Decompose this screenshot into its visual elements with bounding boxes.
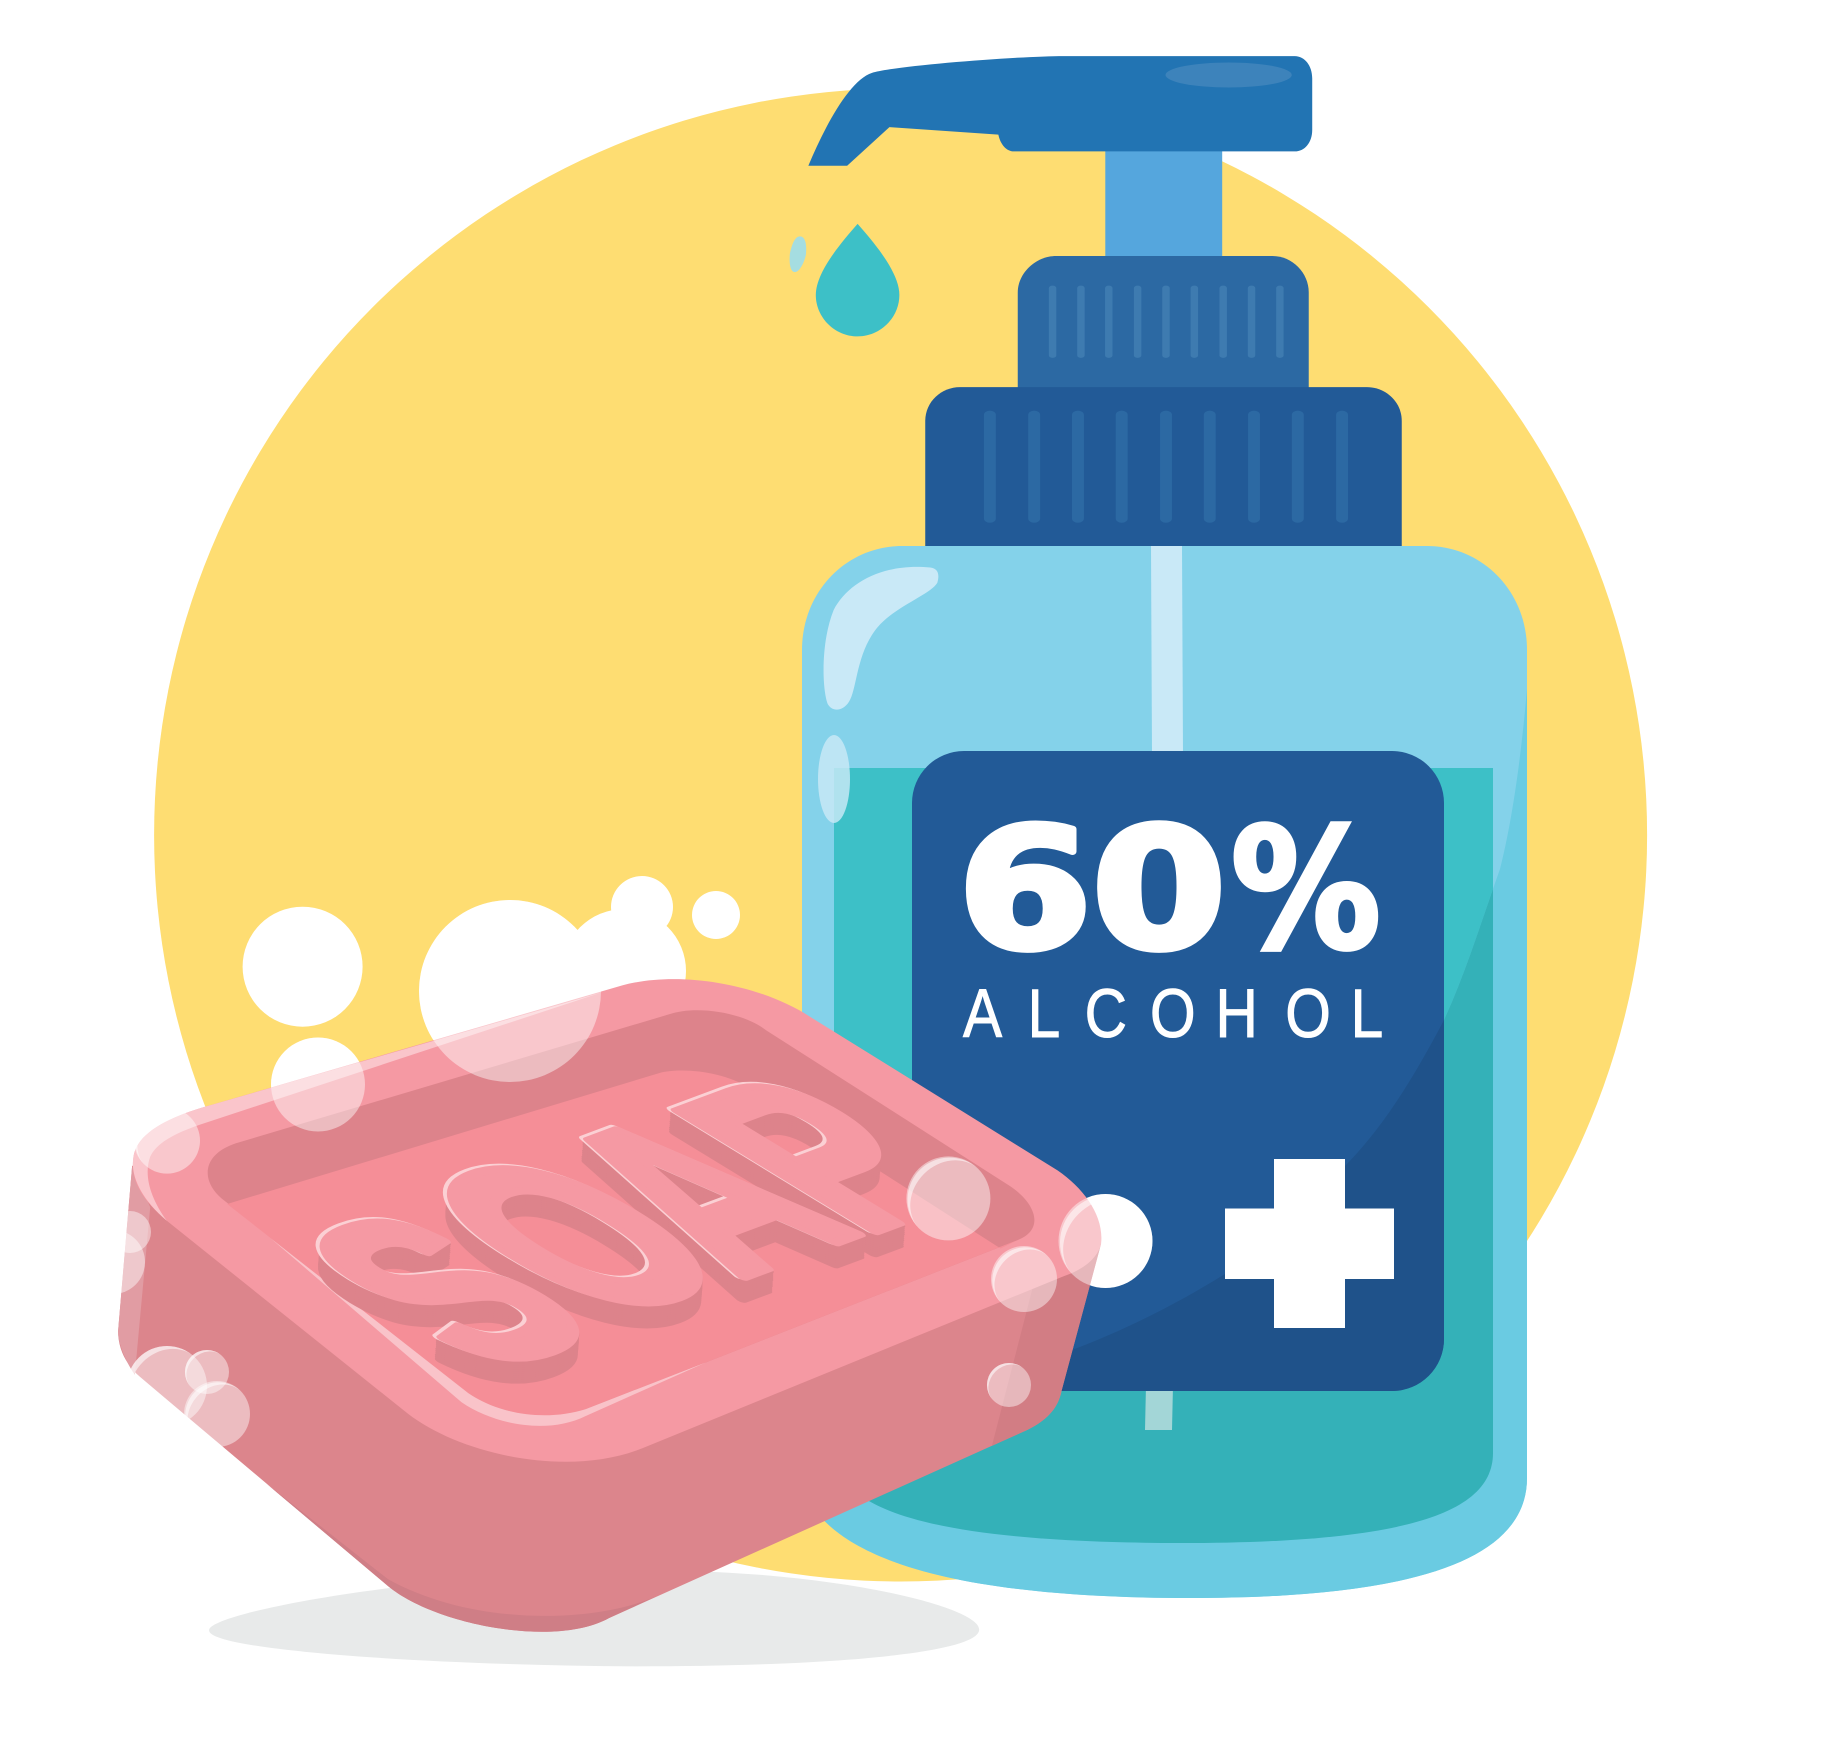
small shine oval: [818, 735, 850, 823]
soap top face: [133, 979, 1101, 1462]
soap lettering: SOAP: [222, 1028, 1040, 1411]
upper collar: [1018, 256, 1309, 388]
yellow background circle: [154, 88, 1647, 1582]
recess lower highlight: [271, 1238, 706, 1426]
falling drop: [816, 224, 899, 336]
pump stem: [1105, 150, 1222, 257]
60 percent text: 60: [958, 794, 1226, 987]
shine highlight: [824, 567, 938, 710]
soap side: [118, 1088, 1101, 1632]
recess wall: [208, 1010, 1034, 1416]
60 percent text: %: [1231, 794, 1381, 987]
label shading: [1062, 1020, 1444, 1391]
translucent bubbles on soap: [81, 900, 1152, 1447]
alcohol text: ALCOHOL: [963, 975, 1383, 1052]
recess floor: [227, 1071, 1017, 1416]
label dot: [1058, 1194, 1152, 1288]
soap right facet: [992, 1244, 1101, 1446]
medical cross: [1225, 1159, 1394, 1328]
bubble rims: [127, 1109, 1139, 1437]
dip tube: [1151, 546, 1183, 755]
label: [912, 751, 1444, 1391]
60 percent text: [958, 794, 1381, 987]
soap bar: [118, 979, 1101, 1632]
small drop glint: [790, 236, 806, 272]
bottle: [802, 546, 1527, 1598]
soap bottom shade: [267, 1485, 656, 1632]
illustration: [118, 56, 1648, 1666]
lower collar: [925, 387, 1402, 547]
body shading: [824, 691, 1527, 1598]
pump: [790, 56, 1402, 547]
dip tube lower: [1145, 1385, 1173, 1430]
pump head: [808, 56, 1312, 166]
foam bubbles behind soap: [243, 876, 740, 1132]
soap left facet: [118, 1166, 150, 1375]
ground shadow: [209, 1571, 979, 1666]
bottle body: [802, 546, 1527, 1598]
top edge highlight: [133, 992, 602, 1221]
liquid: [834, 768, 1493, 1543]
pump head highlight: [1165, 62, 1292, 87]
